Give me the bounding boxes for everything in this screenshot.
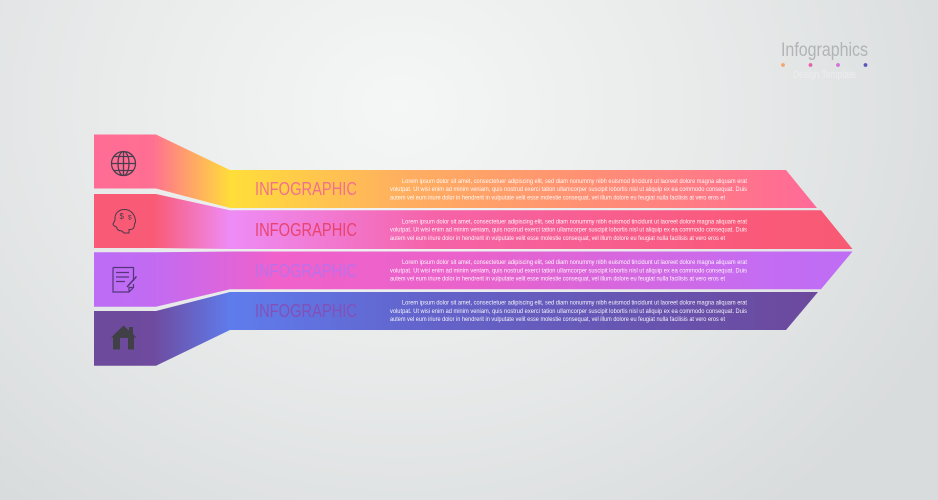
icon: document with pen xyxy=(113,268,136,292)
text block: band 2: volutpat. Ut wisi enim ad minim veniam, quis nostrud exerci tation ullamcorper suscipit lobortis nisl ut aliquip ex ea commodo consequat. Duis xyxy=(390,226,748,234)
panel: band 2 pink-red xyxy=(94,194,852,249)
text block: band 1: Lorem ipsum dolor sit amet, consectetuer adipiscing elit, sed diam nonummy nibh euismod tincidunt ut laoreet dolore magna aliquam erat xyxy=(402,178,747,185)
icon: house xyxy=(111,326,136,350)
text block: band 1: autem vel eum iriure dolor in hendrerit in vulputate velit esse molestie consequat, vel illum dolore eu feugiat nulla facilisis at vero eros et xyxy=(390,194,725,202)
subtitle: Design Template xyxy=(793,69,856,81)
heading: band 1: INFOGRAPHIC xyxy=(255,178,357,199)
text block: band 2: Lorem ipsum dolor sit amet, consectetuer adipiscing elit, sed diam nonummy nibh euismod tincidunt ut laoreet dolore magna aliquam erat xyxy=(402,218,747,226)
text block: band 1: volutpat. Ut wisi enim ad minim veniam, quis nostrud exerci tation ullamcorper suscipit lobortis nisl ut aliquip ex ea commodo consequat. Duis xyxy=(390,186,748,193)
heading: band 2: INFOGRAPHIC xyxy=(255,219,357,240)
legend dots xyxy=(781,63,867,67)
text block: band 2: autem vel eum iriure dolor in hendrerit in vulputate velit esse molestie consequat, vel illum dolore eu feugiat nulla facilisis at vero eros et xyxy=(390,235,725,242)
text block: band 3 xyxy=(390,259,748,282)
title: Infographics xyxy=(781,39,868,61)
text block: band 4: volutpat. Ut wisi enim ad minim veniam, quis nostrud exerci tation ullamcorper suscipit lobortis nisl ut aliquip ex ea commodo consequat. Duis xyxy=(390,308,748,315)
panel: band 4 blue-purple xyxy=(94,292,818,366)
heading: band 3: INFOGRAPHIC xyxy=(255,260,357,281)
text block: band 4: Lorem ipsum dolor sit amet, consectetuer adipiscing elit, sed diam nonummy nibh euismod tincidunt ut laoreet dolore magna aliquam erat xyxy=(402,300,747,306)
panel: band 3 violet xyxy=(94,252,852,307)
icon: head with dollar signs: $ xyxy=(128,214,132,222)
icon: head with dollar signs xyxy=(113,210,136,233)
text block: band 3: autem vel eum iriure dolor in hendrerit in vulputate velit esse molestie consequat, vel illum dolore eu feugiat nulla facilisis at vero eros et xyxy=(390,276,725,282)
text block: band 3: Lorem ipsum dolor sit amet, consectetuer adipiscing elit, sed diam nonummy nibh euismod tincidunt ut laoreet dolore magna aliquam erat xyxy=(402,259,747,266)
panel: band 1 yellow-pink xyxy=(94,134,817,208)
text block: band 4: autem vel eum iriure dolor in hendrerit in vulputate velit esse molestie consequat, vel illum dolore eu feugiat nulla facilisis at vero eros et xyxy=(390,316,725,323)
text block: band 1 xyxy=(390,178,748,202)
text block: band 4 xyxy=(390,300,748,323)
icon: head with dollar signs: $ xyxy=(120,212,124,221)
heading: band 4: INFOGRAPHIC xyxy=(255,300,357,321)
title block xyxy=(781,39,868,81)
text block: band 3: volutpat. Ut wisi enim ad minim veniam, quis nostrud exerci tation ullamcorper suscipit lobortis nisl ut aliquip ex ea commodo consequat. Duis xyxy=(390,268,748,274)
icon: globe xyxy=(112,152,136,176)
text block: band 2 xyxy=(390,218,748,242)
